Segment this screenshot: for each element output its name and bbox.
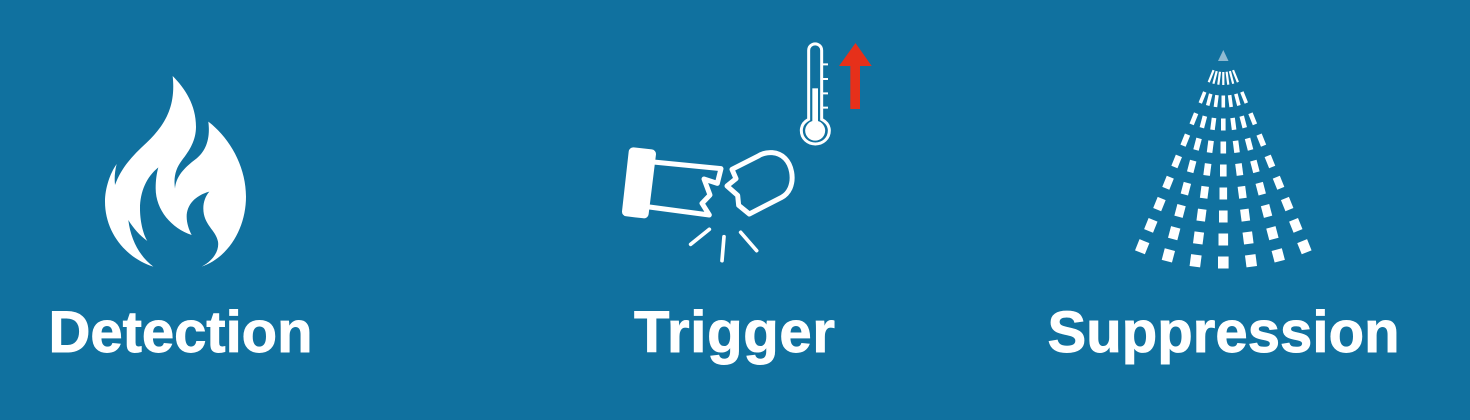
heading: Trigger: Trigger: [634, 300, 835, 365]
broken bulb body: [649, 162, 721, 215]
thermometer bulb: [805, 121, 825, 141]
glass shards: [691, 229, 757, 261]
heading: Detection: Detection: [48, 300, 312, 365]
spray nozzle: [1218, 50, 1228, 61]
broken bulb tip: [727, 153, 792, 214]
bulb base cap: [627, 152, 651, 214]
icon: water spray cone: [1135, 50, 1312, 268]
icon: broken glass bulb: [627, 152, 792, 261]
heading: Suppression: Suppression: [1048, 300, 1400, 365]
tick marks: [821, 64, 828, 108]
icon: flame: [105, 76, 246, 267]
icon: thermometer: [801, 44, 829, 144]
mercury level: [812, 88, 818, 125]
thermometer outline: [801, 44, 829, 144]
icon: red up arrow: [839, 43, 872, 109]
